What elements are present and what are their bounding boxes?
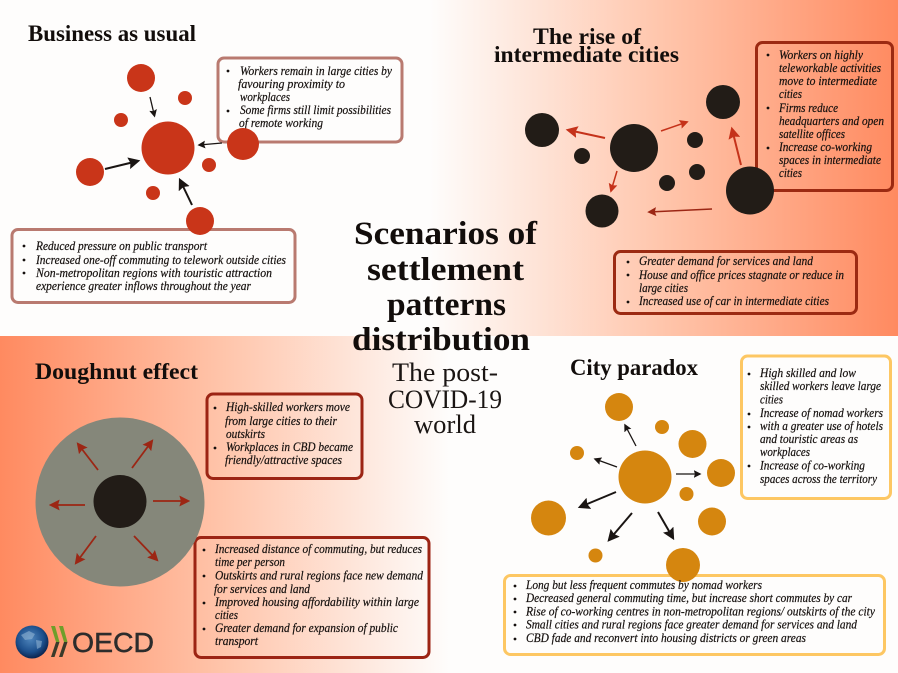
callout: reduced pressure	[12, 230, 295, 302]
subtitle: world	[414, 410, 476, 439]
callout: greater demand: House and office prices stagnate or reduce in	[638, 268, 844, 282]
callout: workers on highly teleworkable: Firms reduce	[778, 101, 838, 115]
callout: workers on highly teleworkable: teleworkable activities	[779, 61, 881, 75]
callout: long but less frequent commutes: Rise of co-working centres in non-metropolitan regions/ outskirts of the city	[525, 604, 875, 618]
subtitle: COVID-19	[388, 385, 502, 414]
callout: high-skilled workers: Workplaces in CBD became	[226, 440, 353, 454]
callout: workers on highly teleworkable	[756, 42, 892, 190]
callout: workers on highly teleworkable: Increase co-working	[778, 140, 872, 154]
callout: long but less frequent commutes: Small cities and rural regions face greater demand for services and land	[526, 618, 858, 632]
heading: the rise of intermediate cities	[494, 24, 679, 67]
callout: long but less frequent commutes: Long but less frequent commutes by nomad workers	[525, 578, 762, 592]
callout: workers on highly teleworkable: cities	[779, 87, 802, 101]
callout: workers on highly teleworkable: Workers on highly	[779, 48, 863, 62]
heading: city paradox: City paradox	[570, 355, 698, 380]
callout: high-skilled workers: outskirts	[226, 427, 265, 441]
callout: increased distance: Increased distance of commuting, but reduces	[214, 542, 422, 556]
callout: reduced pressure: Increased one-off commuting to telework outside cities	[35, 253, 286, 267]
main title: settlement	[367, 252, 524, 288]
diagram: dispersal to intermediate cities	[525, 85, 774, 228]
background: bottom left gradient	[0, 336, 449, 673]
callout: high skilled and low skilled: spaces across the territory	[760, 472, 877, 486]
callout: high-skilled workers: friendly/attractive spaces	[225, 453, 342, 467]
callout: greater demand: Increased use of car in intermediate cities	[638, 294, 829, 308]
panel: the rise of intermediate cities	[494, 24, 892, 314]
callout: increased distance: time per person	[215, 555, 285, 569]
callout: reduced pressure: Reduced pressure on public transport	[35, 239, 207, 253]
heading: the rise of intermediate cities: The rise of	[533, 24, 641, 49]
heading: the rise of intermediate cities: intermediate cities	[494, 42, 679, 67]
callout: high skilled and low skilled: Increase of nomad workers	[759, 406, 883, 420]
callout: increased distance: Greater demand for expansion of public	[215, 621, 398, 635]
heading: doughnut effect: Doughnut effect	[35, 359, 198, 384]
callout: workers on highly teleworkable: satellite offices	[779, 127, 845, 141]
callout: workers on highly teleworkable: move to intermediate	[779, 74, 877, 88]
callout: long but less frequent commutes: Decreased general commuting time, but increase short commutes by car	[525, 591, 852, 605]
callout: high skilled and low skilled: skilled workers leave large	[760, 379, 881, 393]
callout: increased distance: Improved housing affordability within large	[214, 595, 419, 609]
callout: reduced pressure: experience greater inflows throughout the year	[36, 279, 251, 293]
diagram: doughnut with outward arrows	[36, 418, 204, 586]
callout: high-skilled workers	[207, 394, 362, 478]
subtitle	[388, 358, 502, 439]
callout: greater demand: Greater demand for services and land	[639, 254, 814, 268]
callout: workers on highly teleworkable: cities	[779, 166, 802, 180]
callout: increased distance: transport	[215, 634, 258, 648]
subtitle: The post-	[392, 358, 498, 387]
logo: OECD: OECD	[72, 627, 154, 658]
callout: increased distance: Outskirts and rural regions face new demand	[215, 568, 424, 582]
main title	[352, 216, 538, 358]
diagram: cities flowing outward	[531, 393, 735, 562]
callout: workers on highly teleworkable: headquarters and open	[779, 114, 884, 128]
callout: workers remain: of remote working	[239, 116, 323, 130]
callout: high skilled and low skilled: workplaces	[760, 445, 810, 459]
callout: high skilled and low skilled: and touristic areas as	[760, 432, 858, 446]
callout: increased distance: for services and land	[214, 582, 311, 596]
callout: increased distance: cities	[215, 608, 238, 622]
panel: city paradox	[504, 355, 890, 654]
callout: high-skilled workers: from large cities to their	[225, 414, 337, 428]
callout: high skilled and low skilled: Increase of co-working	[759, 458, 865, 472]
callout: long but less frequent commutes: CBD fade and reconvert into housing districts or green areas	[526, 631, 806, 645]
heading: business as usual: Business as usual	[28, 21, 196, 46]
callout: high skilled and low skilled: High skilled and low	[759, 366, 857, 380]
callout: reduced pressure: Non-metropolitan regions with touristic attraction	[35, 266, 272, 280]
main title: patterns	[387, 287, 506, 323]
callout: long but less frequent commutes	[504, 548, 884, 654]
callout: high skilled and low skilled	[742, 356, 890, 498]
callout: workers remain: Some firms still limit possibilities	[240, 103, 391, 117]
callout: high skilled and low skilled: cities	[760, 392, 783, 406]
logo: OECD	[16, 626, 154, 658]
main title: distribution	[352, 322, 530, 358]
panel: doughnut effect	[16, 359, 429, 658]
panel: business as usual	[12, 21, 402, 302]
callout: high-skilled workers: High-skilled workers move	[225, 400, 350, 414]
callout: workers remain	[218, 58, 402, 142]
callout: workers remain: Workers remain in large cities by	[240, 64, 392, 78]
diagram: cities flowing inward	[76, 64, 259, 235]
main title: Scenarios of	[354, 216, 538, 252]
callout: workers on highly teleworkable: spaces in intermediate	[779, 153, 881, 167]
callout: increased distance	[195, 538, 429, 658]
callout: greater demand	[614, 252, 856, 314]
background: top right gradient	[430, 0, 898, 336]
callout: workers remain: favouring proximity to	[238, 77, 345, 91]
callout: greater demand: large cities	[639, 281, 688, 295]
callout: high skilled and low skilled: with a greater use of hotels	[760, 419, 883, 433]
callout: workers remain: workplaces	[240, 90, 290, 104]
